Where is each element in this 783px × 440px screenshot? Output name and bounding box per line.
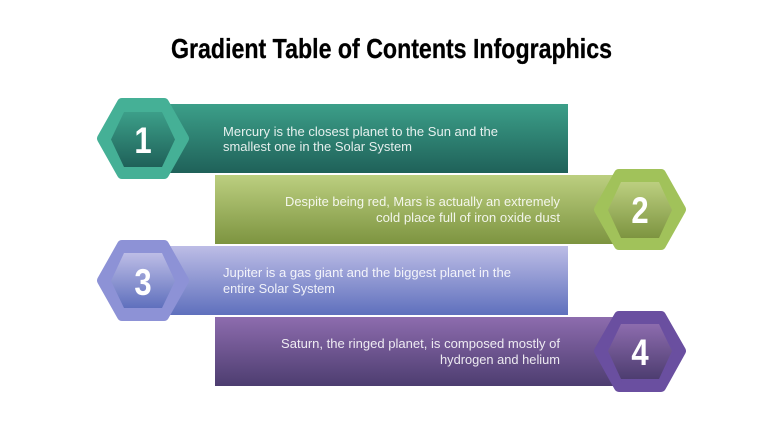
icon: hexagon 4 [599, 316, 681, 387]
bar 2 [215, 175, 625, 244]
text: item 4 [281, 336, 560, 367]
bar 4 [215, 317, 625, 386]
panel: item 3 [102, 245, 568, 316]
icon: hexagon 4: 4 [631, 333, 649, 374]
icon: hexagon 3 [102, 245, 184, 316]
text: item 3: entire Solar System [223, 281, 335, 296]
icon: hexagon 1: 1 [134, 121, 152, 162]
text: item 2: Despite being red, Mars is actually an extremely [285, 194, 560, 209]
text: item 2: cold place full of iron oxide dust [376, 210, 560, 225]
panel: item 2 [215, 174, 681, 245]
text: item 4: Saturn, the ringed planet, is composed mostly of [281, 336, 560, 351]
text: item 1 [223, 124, 498, 154]
panel: item 1 [102, 103, 568, 174]
text: item 2 [285, 194, 560, 225]
icon: hexagon 2: 2 [631, 191, 649, 232]
icon: hexagon 3: 3 [134, 263, 152, 304]
text: item 1: Mercury is the closest planet to the Sun and the [223, 124, 498, 139]
icon: hexagon 2 [599, 174, 681, 245]
text: item 4: hydrogen and helium [440, 352, 560, 367]
bar 1 [150, 104, 568, 173]
bar 3 [150, 246, 568, 315]
text: item 3 [223, 265, 511, 296]
text: item 1: smallest one in the Solar System [223, 139, 412, 154]
panel: item 4 [215, 316, 681, 387]
title: Gradient Table of Contents Infographics [171, 33, 612, 64]
text: item 3: Jupiter is a gas giant and the biggest planet in the [223, 265, 511, 280]
icon: hexagon 1 [102, 103, 184, 174]
